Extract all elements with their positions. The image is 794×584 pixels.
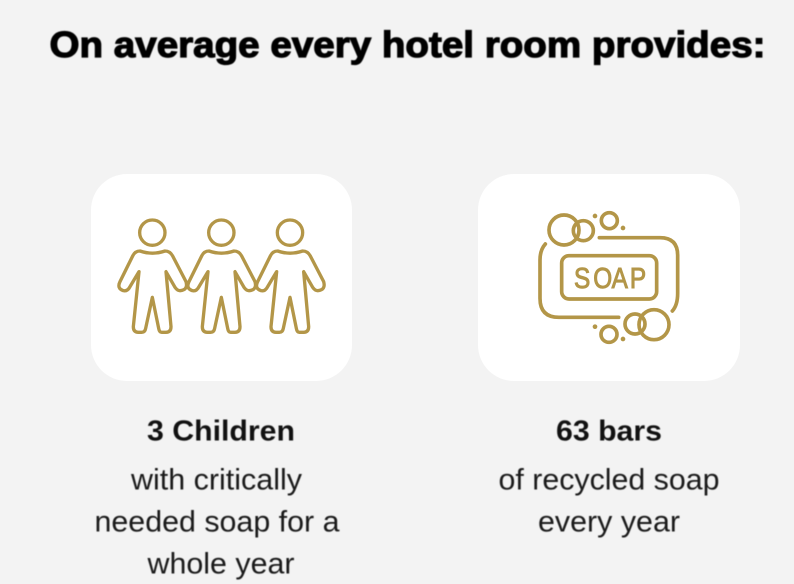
text block: soap: 63 bars xyxy=(556,416,662,448)
text block: children xyxy=(94,416,340,580)
panel background: children xyxy=(91,174,352,381)
text block: children: with critically xyxy=(130,464,302,496)
panel background: soap xyxy=(478,174,740,381)
text block: children: needed soap for a xyxy=(94,506,340,538)
text block: children: whole year xyxy=(146,548,295,580)
icon: three children holding hands xyxy=(119,220,324,332)
text block: soap: every year xyxy=(538,506,680,538)
title: On average every hotel room provides: xyxy=(50,24,766,65)
panel: children xyxy=(91,174,352,381)
text block: soap: of recycled soap xyxy=(498,464,720,496)
soap label: SOAP xyxy=(574,262,646,294)
text block: children: 3 Children xyxy=(147,416,295,448)
text block: soap xyxy=(498,416,720,538)
icon: soap bar with bubbles xyxy=(540,213,678,342)
panel: soap xyxy=(478,174,740,381)
